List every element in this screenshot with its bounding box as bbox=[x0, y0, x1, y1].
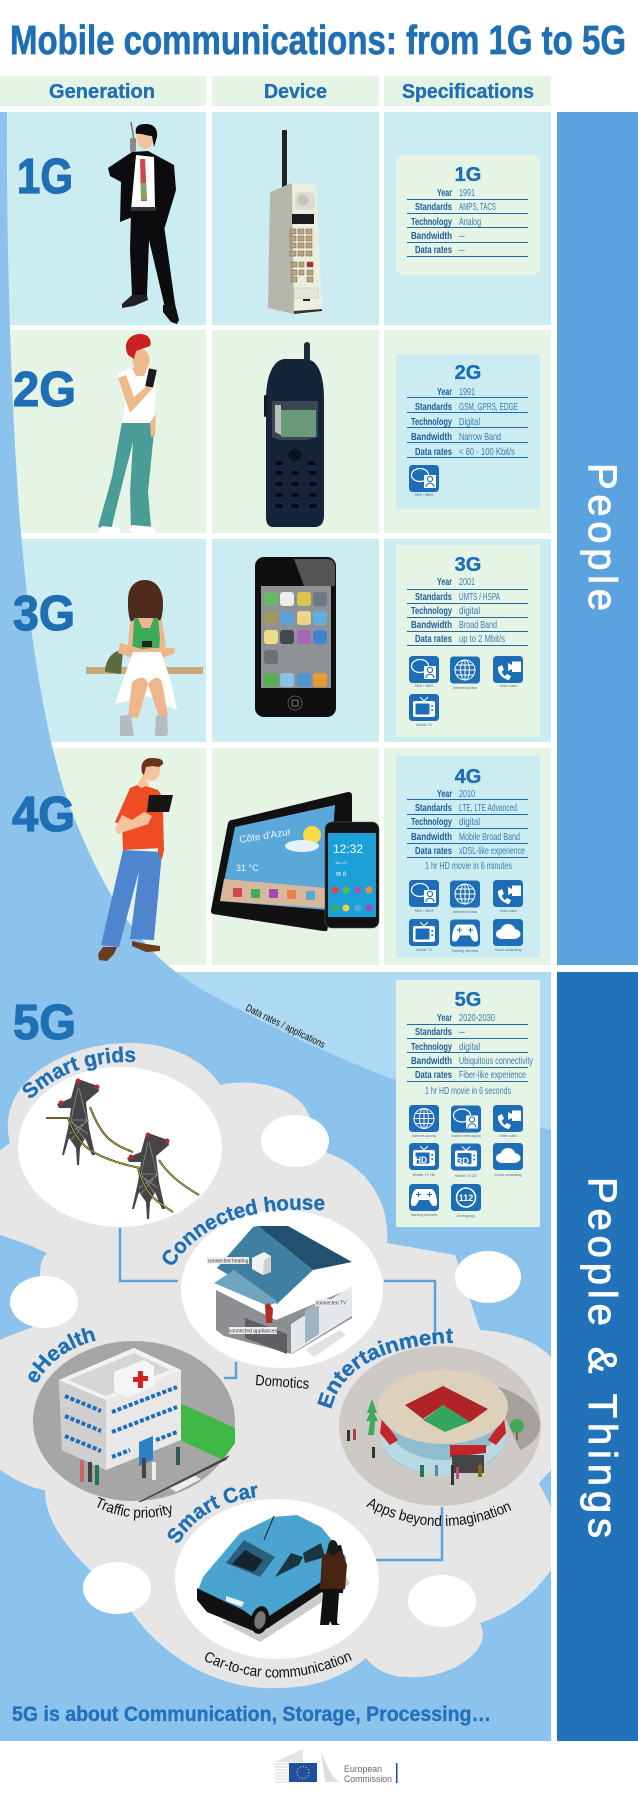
device: tablet and phone: 31 °C bbox=[236, 863, 259, 873]
logo: European Commission: European bbox=[344, 1764, 382, 1774]
icons: 3G services: Mobile TV bbox=[416, 723, 433, 727]
heading: 5G: 5G bbox=[455, 989, 481, 1011]
generation labels: 2G bbox=[13, 363, 76, 417]
spec table: 5G: Year bbox=[437, 1012, 452, 1024]
spec table: 4G: Technology bbox=[411, 816, 452, 828]
icons: 4G services: Video calls bbox=[499, 909, 517, 913]
spec table: 2G: GSM, GPRS, EDGE bbox=[459, 401, 518, 413]
spec table: 4G: LTE, LTE Advanced bbox=[459, 802, 517, 814]
spec table: 3G: UMTS / HSPA bbox=[459, 591, 500, 603]
side band: People & Things: People & Things bbox=[580, 1177, 624, 1538]
device: tablet and phone: 12:32 bbox=[333, 842, 363, 856]
spec table: 1G: Year bbox=[437, 187, 452, 199]
spec table: 5G: Standards bbox=[415, 1026, 452, 1038]
spec table: 1G: Standards bbox=[415, 201, 452, 213]
scene: eHealth hospital bbox=[28, 1328, 235, 1502]
scene: connected house bbox=[162, 1196, 383, 1368]
icons: 4G services: Internet access bbox=[453, 910, 477, 914]
spec table: 1G: Analog bbox=[459, 216, 481, 228]
spec table: 5G: Data rates bbox=[415, 1069, 452, 1081]
generation labels: 5G bbox=[13, 996, 76, 1050]
icons: 4G services: Mobile TV bbox=[416, 948, 433, 952]
icons: 4G services: Cloud computing bbox=[495, 948, 521, 952]
panel: 2G specifications bbox=[396, 354, 540, 509]
spec table: 3G: 2001 bbox=[459, 576, 475, 588]
spec table: 3G: Technology bbox=[411, 605, 452, 617]
scene: connected house: connected appliances bbox=[229, 1328, 278, 1334]
logo: European Commission: Commission bbox=[344, 1774, 392, 1784]
spec table: 3G: Broad Band bbox=[459, 619, 497, 631]
spec table: 3G: Year bbox=[437, 576, 452, 588]
heading: 4G: 4G bbox=[455, 766, 481, 788]
icons: 5G services: Gaming services bbox=[411, 1213, 438, 1217]
caption: Apps beyond imagination: Apps beyond imagination bbox=[366, 1498, 512, 1526]
heading: Smart grids: Smart grids bbox=[22, 1046, 136, 1098]
spec table: 3G: Data rates bbox=[415, 633, 452, 645]
column headers bbox=[0, 76, 551, 106]
spec table: 2G: 1991 bbox=[459, 386, 475, 398]
icons: 5G services: Emergency bbox=[457, 1214, 475, 1218]
side band: People bbox=[557, 112, 638, 965]
icons: 3G services: Internet access bbox=[453, 686, 477, 690]
icons: 4G services: Gaming services bbox=[452, 949, 479, 953]
heading: 1G: 1G bbox=[455, 164, 481, 186]
tagline: 5G is about Communication, Storage, Processing… bbox=[12, 1703, 491, 1726]
heading: Connected house: Connected house bbox=[162, 1196, 324, 1265]
panel: 3G specifications bbox=[396, 545, 540, 737]
icons: 3G services bbox=[409, 656, 523, 727]
icons: 5G services: HD bbox=[415, 1155, 427, 1165]
person: man with tablet bbox=[98, 758, 173, 961]
scene: smart grids bbox=[18, 1046, 222, 1227]
icons: 5G services: Mobile TV HD bbox=[413, 1173, 436, 1177]
spec table: 1G: 1991 bbox=[459, 187, 475, 199]
spec table: 1G: AMPS, TACS bbox=[459, 201, 496, 213]
spec table: 2G: Narrow Band bbox=[459, 431, 501, 443]
spec table: 1G: – bbox=[459, 244, 465, 256]
device: 3G smartphone bbox=[255, 557, 336, 717]
icons: 5G services: 112 bbox=[459, 1193, 473, 1203]
spec table: 2G: Year bbox=[437, 386, 452, 398]
icons: 4G services: SMS / MMS bbox=[414, 909, 434, 913]
icon: SMS / MMS bbox=[409, 465, 439, 497]
cloud: 5G applications bbox=[0, 1043, 551, 1688]
spec table: 3G: up to 2 Mbit/s bbox=[459, 633, 505, 645]
person: woman with red hair and phone bbox=[97, 334, 157, 536]
spec table: 4G: xDSL-like experience bbox=[459, 845, 525, 857]
icons: 5G services: Mobile TV 3D bbox=[455, 1174, 477, 1178]
spec table: 2G: Bandwidth bbox=[411, 431, 452, 443]
panel: 5G specifications bbox=[396, 980, 540, 1227]
device: tablet and phone bbox=[211, 792, 379, 931]
panel: 1G specifications bbox=[396, 155, 540, 275]
caption: Domotics: Domotics bbox=[255, 1372, 310, 1393]
icons: 5G services bbox=[409, 1105, 523, 1218]
connectors bbox=[120, 1228, 442, 1560]
scene: entertainment stadium bbox=[317, 1328, 541, 1506]
icons: 3G services: SMS / MMS bbox=[414, 684, 434, 688]
device: tablet and phone: Côte d'Azur bbox=[239, 827, 292, 846]
generation labels: 1G bbox=[17, 150, 73, 204]
spec table: 2G: Digital bbox=[459, 416, 480, 428]
spec table: 1G: Data rates bbox=[415, 244, 452, 256]
panel: 4G specifications bbox=[396, 756, 540, 958]
spec table: 5G: Technology bbox=[411, 1041, 452, 1053]
spec table: 4G: 1 hr HD movie in 6 minutes bbox=[425, 860, 512, 872]
icons: 4G services bbox=[409, 880, 523, 953]
icons: 3G services: Video calls bbox=[499, 684, 517, 688]
scene: connected house: connected heating bbox=[208, 1258, 249, 1264]
spec table: 4G: Bandwidth bbox=[411, 831, 452, 843]
heading: Entertainment: Entertainment bbox=[317, 1328, 454, 1409]
device: 2G phone bbox=[264, 342, 324, 527]
spec table: 5G: digital bbox=[459, 1041, 480, 1053]
generation labels: 3G bbox=[13, 587, 75, 641]
spec table: 3G: Bandwidth bbox=[411, 619, 452, 631]
spec table: 1G: – bbox=[459, 230, 465, 242]
spec table: 5G: 1 hr HD movie in 6 seconds bbox=[425, 1085, 511, 1097]
icons: 5G services: Internet access bbox=[412, 1134, 436, 1138]
caption: Traffic priority: Traffic priority bbox=[97, 1496, 172, 1521]
icons: 5G services: Instant messaging bbox=[451, 1134, 481, 1138]
generation labels: 4G bbox=[12, 788, 75, 842]
spec table: 2G: Technology bbox=[411, 416, 452, 428]
device: tablet and phone: ✉ 8 bbox=[336, 872, 347, 878]
spec table: 2G: Standards bbox=[415, 401, 452, 413]
spec table: 3G: Standards bbox=[415, 591, 452, 603]
spec table: 1G: Bandwidth bbox=[411, 230, 452, 242]
heading: 2G: 2G bbox=[455, 362, 481, 384]
spec table: 5G: 2020-2030 bbox=[459, 1012, 495, 1024]
icons: 5G services: 3D bbox=[457, 1156, 470, 1166]
column headers: Specifications bbox=[402, 81, 534, 103]
spec table: 2G bbox=[407, 386, 528, 458]
spec table: 5G: Bandwidth bbox=[411, 1055, 452, 1067]
side band: People: People bbox=[580, 463, 624, 611]
device: 1G brick phone bbox=[268, 130, 322, 315]
logo: European Commission bbox=[275, 1749, 398, 1784]
spec table: 5G bbox=[407, 1012, 534, 1097]
column headers: Generation bbox=[49, 81, 155, 103]
heading: Smart Car: Smart Car bbox=[168, 1486, 258, 1543]
spec table: 4G: digital bbox=[459, 816, 480, 828]
spec table: 4G bbox=[407, 788, 528, 872]
heading: 3G: 3G bbox=[455, 554, 481, 576]
side band: People & Things bbox=[557, 972, 638, 1741]
spec table: 3G bbox=[407, 576, 528, 646]
curved blue background bbox=[0, 112, 551, 1741]
spec table: 4G: Data rates bbox=[415, 845, 452, 857]
scene: connected house: connected TV bbox=[316, 1300, 347, 1306]
person: businessman with brick phone bbox=[108, 122, 179, 324]
spec table: 4G: 2010 bbox=[459, 788, 475, 800]
spec table: 4G: Standards bbox=[415, 802, 452, 814]
spec table: 2G: Data rates bbox=[415, 446, 452, 458]
spec table: 4G: Mobile Broad Band bbox=[459, 831, 520, 843]
spec table: 1G: Technology bbox=[411, 216, 452, 228]
table row backgrounds bbox=[0, 112, 551, 1741]
caption: Car-to-car communication: Car-to-car communication bbox=[205, 1652, 352, 1678]
icon: SMS / MMS: SMS / MMS bbox=[414, 493, 434, 497]
spec table: 5G: – bbox=[459, 1026, 465, 1038]
spec table: 4G: Year bbox=[437, 788, 452, 800]
heading: eHealth: eHealth bbox=[28, 1328, 96, 1382]
spec table: 5G: Ubiquitous connectivity bbox=[459, 1055, 534, 1067]
spec table: 1G bbox=[407, 187, 528, 256]
spec table: 3G: digital bbox=[459, 605, 480, 617]
column headers: Device bbox=[264, 81, 327, 103]
spec table: 2G: < 80 - 100 Kbit/s bbox=[459, 446, 515, 458]
icons: 5G services: Cloud computing bbox=[495, 1173, 521, 1177]
scene: smart car bbox=[168, 1486, 379, 1659]
spec table: 5G: Fiber-like experience bbox=[459, 1069, 526, 1081]
icons: 5G services: Video calls bbox=[499, 1134, 517, 1138]
person: woman seated on bench bbox=[86, 580, 203, 736]
generation labels bbox=[12, 150, 76, 1050]
annotation: data rates / applications: Data rates / applications bbox=[244, 1003, 327, 1051]
device: tablet and phone: Jun 21 bbox=[335, 860, 348, 865]
